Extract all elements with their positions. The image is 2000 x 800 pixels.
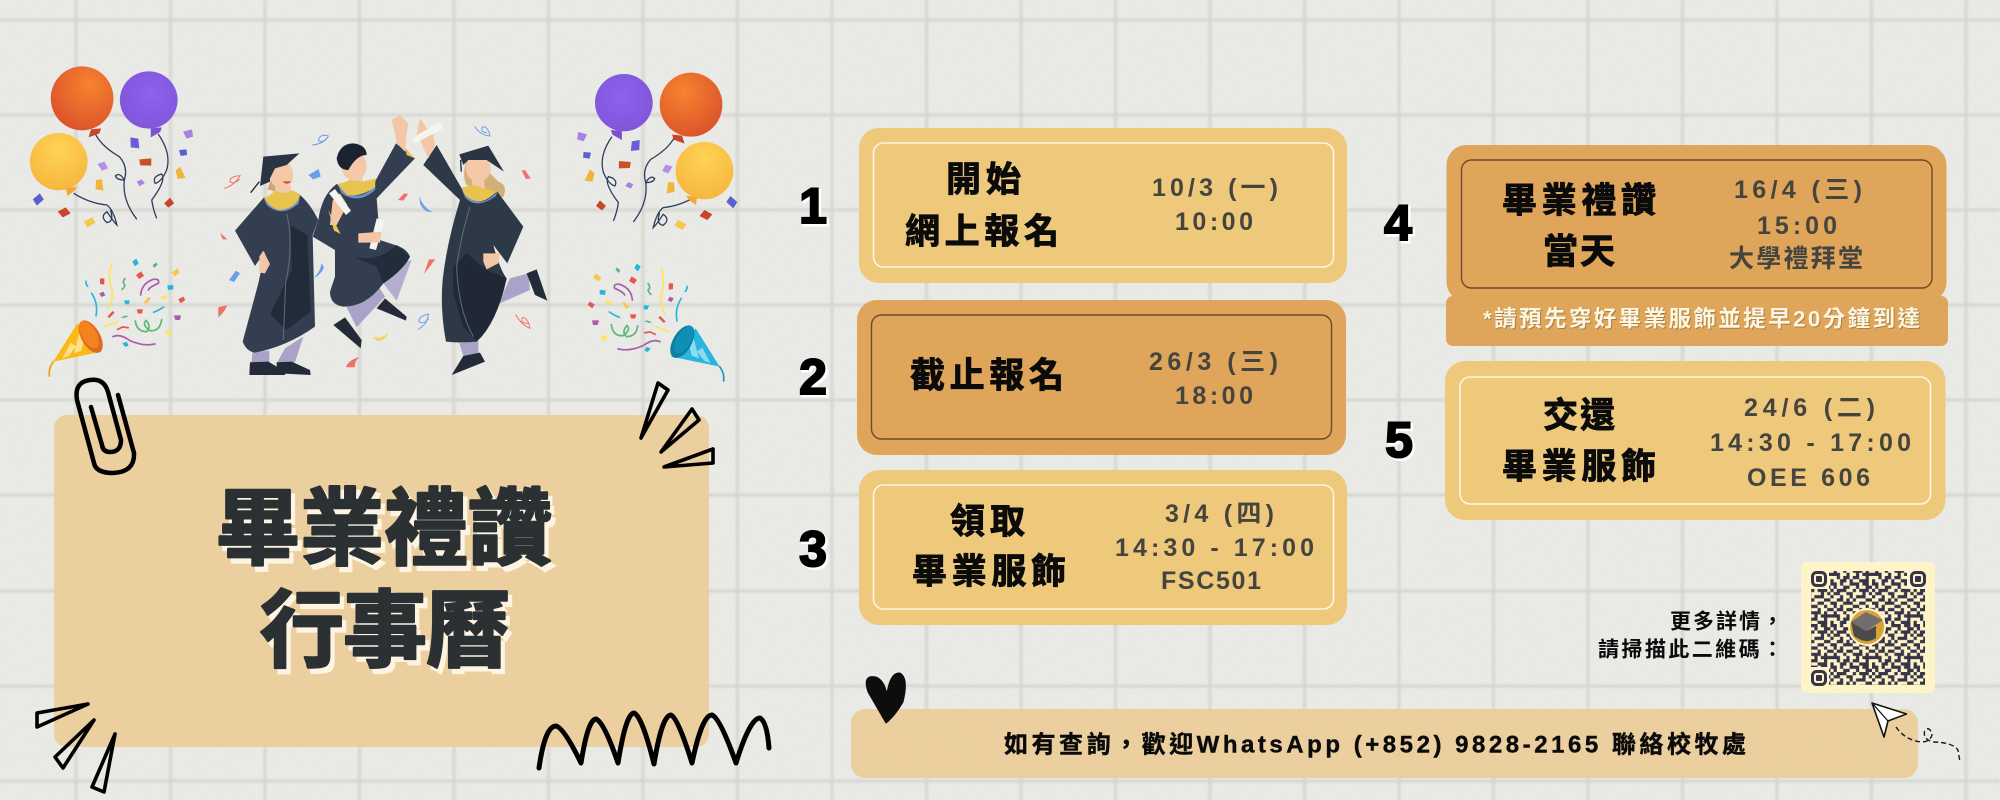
note text: *請預先穿好畢業服飾並提早20分鐘到達 [1483,306,1920,332]
illustration: party popper right [588,264,724,381]
step 2 card [857,300,1346,455]
step 5 card: 24/6 (二) [1744,394,1875,422]
step 1 card: 10:00 [1175,208,1253,236]
icon: paperclip [77,380,134,473]
confetti around graduates [218,127,531,367]
illustration: three graduates [218,115,547,375]
QR prompt text: 更多詳情， [1670,610,1783,634]
decoration: zigzag squiggle [539,713,769,768]
decoration: spikes top right [641,383,713,467]
step 3 number: 3 [799,521,827,577]
step 3 card [859,470,1347,625]
title text: 行事曆 [260,584,510,678]
icon: paper plane with dashed trail [1872,703,1960,762]
step 2 card: 截止報名 [910,356,1064,396]
step 4 card with note strip: 當天 [1543,232,1615,272]
step 3 card: 14:30 - 17:00 [1115,534,1314,562]
step 2 number: 2 [801,351,829,407]
graduate middle [313,115,415,348]
illustration: balloons right [577,73,737,230]
step 3 card: FSC501 [1161,567,1261,595]
step 1 card: 開始 [946,160,1021,200]
step 1 card [859,128,1347,283]
step 4 card with note strip: 畢業禮讚 [1502,182,1656,220]
step 1 card: 網上報名 [905,212,1059,252]
step 5 card [1445,361,1946,520]
step 5 card: 14:30 - 17:00 [1710,429,1911,457]
step 3 card: 領取 [950,502,1025,542]
contact bar [851,709,1918,778]
icon: heart [866,673,905,723]
step 5 number: 5 [1385,412,1413,468]
step 3 card: 3/4 (四) [1165,500,1274,528]
step 1 number: 1 [799,178,827,234]
step 5 number: 5 [1387,414,1415,470]
note text: *請預先穿好畢業服飾並提早20分鐘到達 [1484,306,1921,332]
step 4 number: 4 [1384,195,1412,251]
step 3 card: 畢業服飾 [912,552,1066,592]
step 1 number: 1 [801,180,829,236]
step 4 card with note strip: 16/4 (三) [1734,176,1862,204]
step 2 number: 2 [799,349,827,405]
step 4 number: 4 [1386,197,1414,253]
step 5 card: 畢業服飾 [1502,448,1656,486]
contact bar: 如有查詢，歡迎WhatsApp (+852) 9828-2165 聯絡校牧處 [1004,732,1746,758]
decoration: spikes bottom left [37,704,115,792]
title text: 畢業禮讚 [216,482,552,576]
step 4 card with note strip [1446,145,1948,346]
step 2 card: 26/3 (三) [1149,348,1278,376]
step 5 card: 交還 [1543,396,1615,436]
QR prompt text: 請掃描此二維碼： [1598,638,1783,662]
QR prompt text [1598,610,1783,662]
step 1 card: 10/3 (一) [1152,174,1278,202]
icon: graduation cap in QR [1848,608,1886,646]
illustration: party popper left [49,259,185,376]
step 4 card with note strip: 15:00 [1757,212,1837,240]
step 2 card: 18:00 [1175,382,1253,410]
panel: title [54,415,709,747]
step 4 card with note strip: 大學禮拜堂 [1729,245,1863,273]
graduate left [235,153,318,375]
step 3 number: 3 [801,523,829,579]
illustration: balloons left [30,66,193,227]
step 5 card: OEE 606 [1747,464,1870,492]
title text [216,482,556,683]
title text: 行事曆 [264,589,514,683]
graduate right [412,118,547,375]
QR code [1801,562,1935,693]
title text: 畢業禮讚 [220,487,556,581]
